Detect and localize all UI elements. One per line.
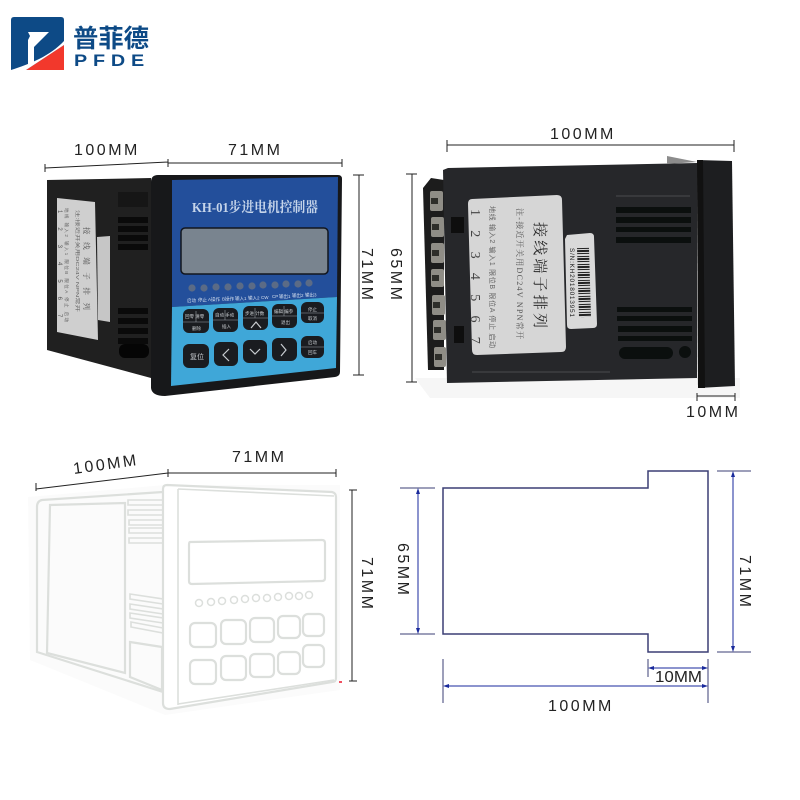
dimension: side photo 10MM: 10MM (686, 404, 740, 421)
dimension: side photo 100MM (447, 126, 734, 152)
side label: 注:接近开关用DC24V NPN常开 (74, 210, 81, 313)
cyan keypad area (171, 297, 337, 386)
LED labels: B操作 (222, 296, 235, 302)
key labels (185, 306, 317, 361)
key labels: 回车 (308, 349, 317, 356)
device side body (47, 178, 151, 378)
dimension: outline 10MM (648, 659, 708, 703)
LED labels: 停止 (198, 296, 207, 304)
LED labels: 输出3 (305, 292, 317, 298)
dimension: front photo height 71MM (353, 175, 375, 375)
side label: 接线端子排列 (82, 227, 92, 310)
key dividers (183, 306, 324, 347)
LED labels: 输出2 (292, 292, 304, 299)
dimension: outline 10MM: 10MM (655, 669, 702, 686)
side body highlights (472, 196, 690, 372)
flange strip (697, 160, 705, 388)
barcode label (565, 233, 597, 329)
wiring label: 注-接近开关用DC24V NPN常开 (515, 208, 525, 339)
key labels: 编辑 编参 (274, 308, 294, 315)
key labels: 停止 (308, 306, 317, 313)
device title: KH-01步进电机控制器 (192, 199, 318, 216)
LED labels: CP (272, 294, 278, 299)
dimension: outline 100MM: 100MM (548, 698, 614, 715)
panel: line drawing (37, 485, 336, 709)
blue face (172, 177, 338, 307)
key labels: 删除 (192, 325, 201, 332)
side label: 1234567 (56, 210, 62, 331)
terminal block (423, 178, 446, 370)
LED labels: 输出1 (279, 293, 291, 300)
dimension: drawing height 71MM: 71MM (358, 557, 375, 611)
drawing front (163, 485, 336, 709)
dimension: drawing 100MM: 100MM (72, 452, 140, 478)
panel: front photo (47, 175, 342, 396)
logo text: 普菲德 (73, 25, 149, 53)
dimension: front photo 100MM: 100MM (74, 142, 140, 159)
panel: technical outline (443, 471, 708, 652)
side label: 地线 输入2 输入1 限位B 限位A 停止 启动 (63, 208, 70, 323)
dimension: drawing 71MM: 71MM (232, 449, 286, 466)
drawing haze (28, 485, 340, 715)
drawing LEDs (196, 592, 312, 606)
dimension: front photo 100MM (45, 142, 168, 172)
red dot (339, 681, 342, 683)
dimension: drawing 71MM (168, 449, 336, 477)
dimension: outline 65MM: 65MM (394, 543, 411, 597)
key labels: 插入 (222, 323, 231, 330)
icon: logo mark (11, 17, 64, 70)
key labels: 步进 计数 (245, 310, 265, 317)
drawing keys (190, 614, 324, 684)
dimension: side photo 65MM: 65MM (387, 248, 404, 302)
dimension: drawing height 71MM (349, 490, 375, 681)
LED labels (187, 292, 317, 304)
clip slots (451, 217, 464, 343)
wiring label (467, 195, 566, 358)
indicator LEDs (188, 279, 313, 292)
logo (11, 17, 150, 70)
LED labels: 输入2 (248, 294, 260, 302)
dimension: front photo 71MM (168, 142, 342, 167)
logo text: PFDE (74, 51, 150, 70)
side label (56, 198, 110, 340)
dimension: side photo 100MM: 100MM (550, 126, 616, 143)
wiring label: 地线 输入2 输入1 限位B 限位A 停止 启动 (488, 206, 497, 348)
dimension: drawing 100MM (36, 452, 168, 491)
wiring label: 1234567 (467, 209, 482, 358)
device front bezel (151, 175, 342, 396)
LED labels: 输入1 (235, 295, 247, 302)
drawing side body (37, 492, 163, 692)
key labels: 复位 (190, 352, 204, 361)
wiring label: 接线端子排列 (531, 222, 548, 328)
dimension: side photo 10MM (686, 393, 740, 421)
LED labels: 启动 (187, 297, 196, 304)
dimension: outline 65MM (394, 488, 435, 634)
dimension: outline 100MM (443, 659, 708, 715)
key labels: 自动 手动 (215, 312, 235, 318)
logo text (73, 25, 150, 70)
panel: side photo (423, 156, 735, 388)
key labels: 启动 (308, 339, 317, 346)
barcode label: S/N:KH2018013951 (568, 248, 575, 317)
key labels: 退出 (281, 319, 290, 326)
top tab (667, 156, 697, 164)
dimension: outline 71MM (717, 471, 753, 652)
LED labels: A操作 (208, 296, 221, 303)
dimension: side photo 65MM (387, 174, 417, 382)
LED labels: CW (261, 295, 269, 300)
dimension: front photo height 71MM: 71MM (358, 248, 375, 302)
side body (443, 163, 697, 383)
dimension: outline 71MM: 71MM (736, 555, 753, 609)
photo backdrop shadow (415, 378, 740, 398)
key labels: 取消 (308, 315, 317, 322)
key labels: 回零 清零 (185, 313, 205, 320)
drawing display (189, 540, 325, 584)
display window (181, 228, 328, 274)
dimension: front photo 71MM: 71MM (228, 142, 282, 159)
vent slots (616, 207, 692, 359)
keypad (183, 302, 324, 368)
flange (697, 160, 735, 388)
key arrows (223, 322, 286, 361)
